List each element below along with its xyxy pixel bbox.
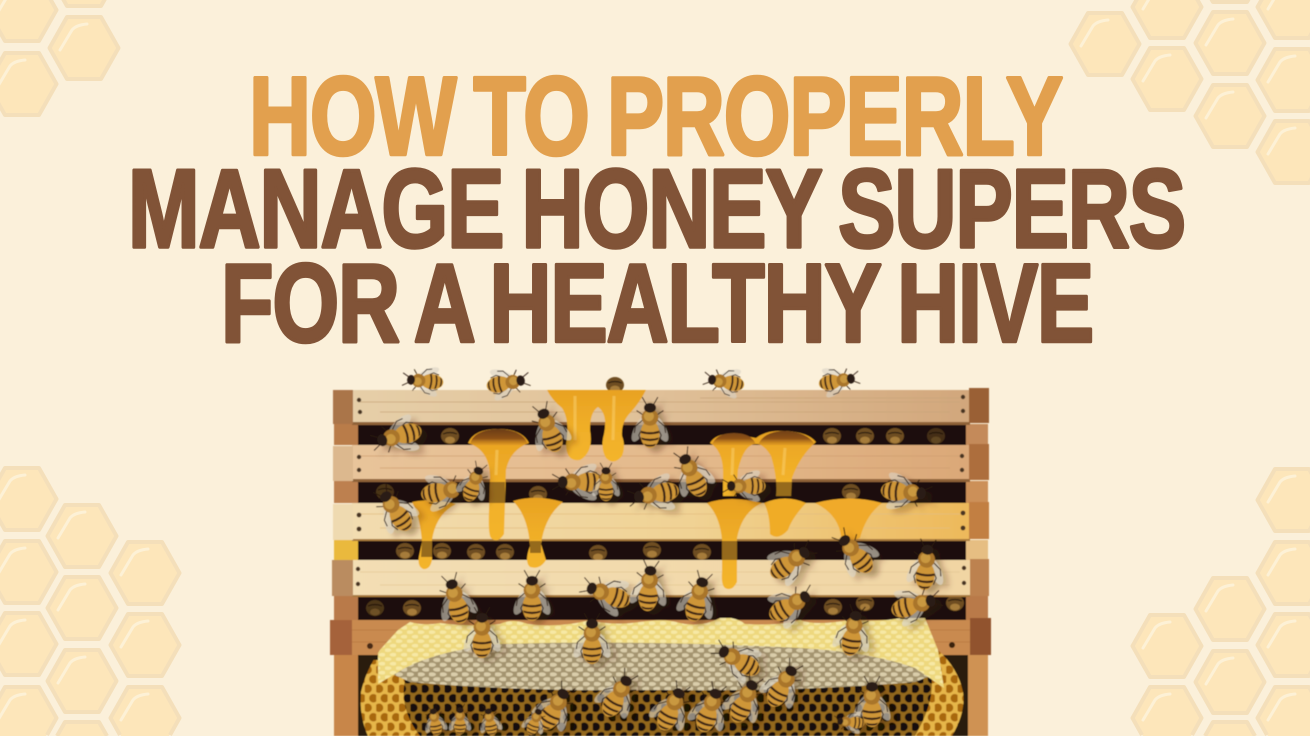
pale yellow crust — [378, 618, 944, 688]
wooden slat 2 — [333, 444, 989, 482]
capped grey cells — [388, 640, 940, 690]
open dark cells — [355, 675, 970, 736]
drip: wide right — [815, 498, 882, 541]
brood bees inside gaps — [366, 377, 964, 616]
honeycomb decoration: top right — [1070, 0, 1310, 183]
drip: third slat left — [412, 500, 456, 569]
title line 1: HOW TO PROPERLY — [249, 54, 1062, 178]
hive illustration — [330, 360, 991, 736]
translucent stems over gaps — [421, 482, 792, 560]
bees on slats and comb — [362, 396, 950, 736]
honey highlights — [496, 396, 785, 475]
drip: second slat left — [468, 429, 529, 540]
wooden slat 3 — [333, 502, 989, 541]
drip: short right — [764, 498, 806, 537]
dark interior gaps — [354, 424, 970, 736]
title — [128, 54, 1185, 366]
wooden slat 1 — [333, 388, 989, 425]
gold cells at left edge — [355, 660, 420, 736]
honey drips — [412, 390, 882, 589]
honeycomb decoration: bottom right — [1132, 469, 1310, 736]
right frame end blocks — [966, 424, 988, 736]
honeycomb decoration: top left — [0, 0, 118, 115]
drip: third slat centre — [513, 498, 563, 568]
lower frame bar — [330, 618, 991, 655]
gold cells at right edge — [915, 650, 970, 736]
honey domes above slat 2 — [470, 429, 815, 445]
drip: long right — [707, 499, 762, 589]
drip: second slat right pair — [710, 431, 816, 496]
honeycomb decoration: bottom left — [0, 468, 180, 736]
drip: top double — [547, 390, 646, 462]
wooden slat 4 — [332, 559, 989, 597]
bees on top of frame — [401, 360, 862, 405]
left frame end blocks — [334, 424, 358, 736]
honeycomb — [355, 618, 970, 736]
